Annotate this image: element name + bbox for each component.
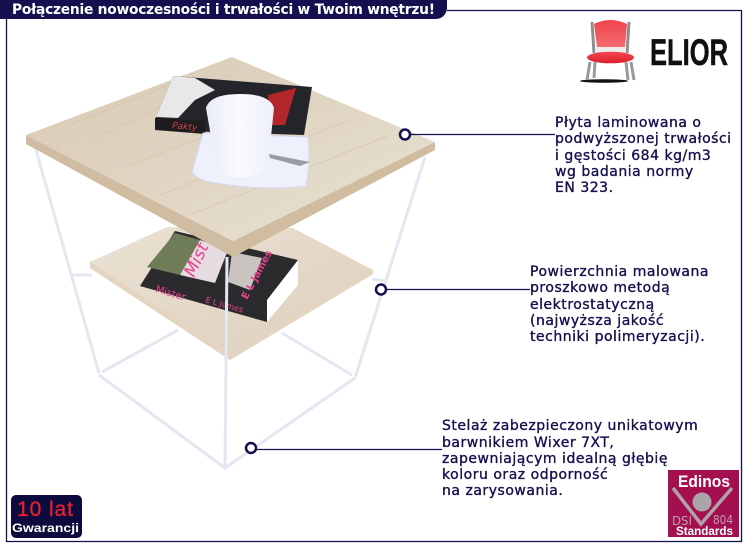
text: frame: zapewniającym idealną głębię xyxy=(442,451,668,467)
text: table top: podwyższonej trwałości xyxy=(555,131,732,147)
book on lower shelf: E L James xyxy=(240,249,275,301)
icon: red chair xyxy=(580,20,634,83)
badge: 10 years warranty: Gwarancji xyxy=(12,521,79,535)
callout: powder coating xyxy=(376,264,709,345)
lower shelf xyxy=(90,227,373,360)
book on lower shelf xyxy=(140,231,298,322)
table top xyxy=(26,57,435,257)
text: frame: na zarysowania. xyxy=(442,483,563,499)
book on lower shelf: Mist xyxy=(180,239,214,280)
book on table top: Pakty xyxy=(172,121,198,134)
badge: 10 years warranty xyxy=(11,495,82,538)
cup xyxy=(206,94,274,177)
badge: Edinos standards xyxy=(668,470,739,538)
text: powder coating: (najwyższa jakość xyxy=(530,313,664,329)
badge: Edinos standards: 804 xyxy=(713,513,733,527)
badge: 10 years warranty: 10 lat xyxy=(17,498,73,521)
title banner: Połączenie nowoczesności i trwałości w Twoim wnętrzu! xyxy=(12,2,435,18)
badge: Edinos standards: DSI xyxy=(672,514,692,528)
text: powder coating: proszkowo metodą xyxy=(530,280,670,296)
table illustration xyxy=(26,57,435,468)
saucer xyxy=(192,133,309,188)
badge: Edinos standards: Standards xyxy=(676,524,733,538)
text: powder coating: elektrostatyczną xyxy=(530,297,655,313)
book on table top xyxy=(155,76,312,135)
text: table top: i gęstości 684 kg/m3 xyxy=(555,148,711,164)
book on lower shelf: Mister xyxy=(154,284,188,304)
text: table top: EN 323. xyxy=(555,180,614,196)
back and side frame rods xyxy=(36,150,425,378)
front frame rods xyxy=(99,257,355,468)
book on lower shelf: E L James xyxy=(204,295,244,315)
text: powder coating: techniki polimeryzacji). xyxy=(530,329,705,345)
logo: Elior chair xyxy=(580,20,728,83)
badge: Edinos standards: Edinos xyxy=(678,472,730,491)
text: frame: koloru oraz odporność xyxy=(442,467,608,483)
callout: table top xyxy=(400,115,732,196)
callout: frame xyxy=(246,418,698,499)
text: frame: Stelaż zabezpieczony unikatowym xyxy=(442,418,698,434)
spoon xyxy=(269,154,310,166)
text: table top: Płyta laminowana o xyxy=(555,115,702,131)
text: powder coating: Powierzchnia malowana xyxy=(530,264,709,280)
text: frame: barwnikiem Wixer 7XT, xyxy=(442,435,614,451)
text: table top: wg badania normy xyxy=(555,164,694,180)
